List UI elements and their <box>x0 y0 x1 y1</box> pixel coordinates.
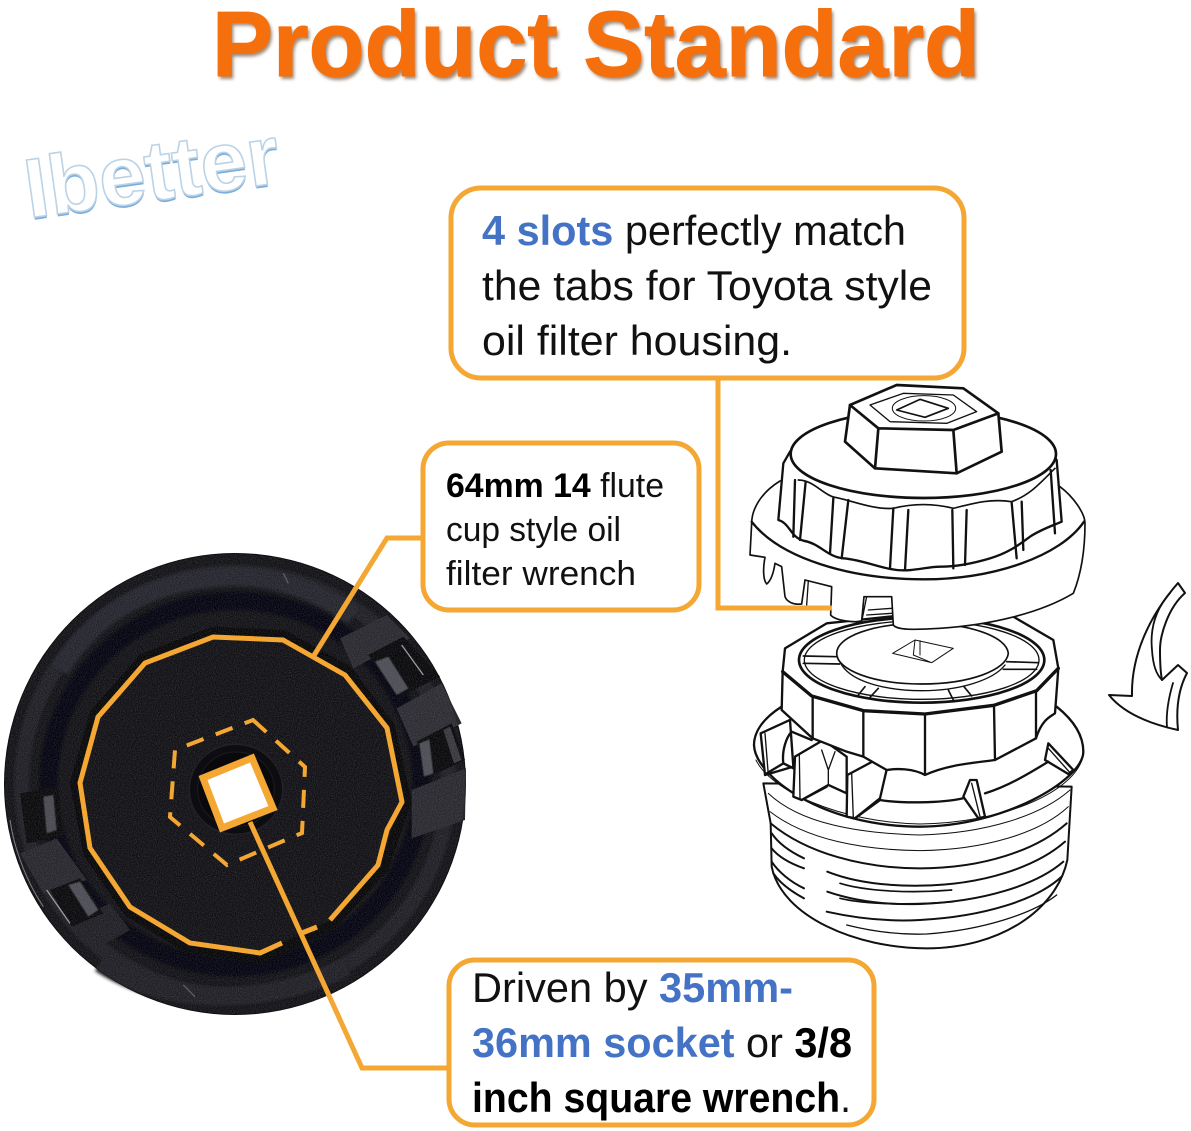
callout: drive size: 36mm socket or 3/8 <box>472 1019 852 1066</box>
callout: 64mm 14 flute <box>423 443 699 610</box>
cup top face <box>791 410 1056 498</box>
hexagon drive head <box>845 385 1002 473</box>
leader: drive callout to square <box>250 822 450 1068</box>
14-flute polygon outline <box>80 637 402 953</box>
outer ring shading <box>10 572 448 997</box>
recessed windows <box>20 637 465 927</box>
centre boss <box>189 744 283 834</box>
oil filter wrench line drawing <box>750 385 1085 629</box>
grip bands <box>20 615 466 947</box>
outer disc <box>4 553 466 1015</box>
dashed hexagon: 36mm socket head <box>170 720 305 865</box>
callout: 64mm 14 flute: 64mm 14 flute <box>446 467 664 505</box>
fluted cup wall <box>778 437 1062 570</box>
housing line drawing <box>754 613 1083 948</box>
callout: drive size: Driven by 35mm- <box>472 964 793 1011</box>
watermark: Ibetter: Ibetter <box>18 107 285 236</box>
callout: 4 slots <box>451 188 964 378</box>
callout: 4 slots: the tabs for Toyota style <box>482 262 932 309</box>
orange outlines on wrench <box>80 637 402 953</box>
octagonal collar <box>782 613 1058 775</box>
disc surface grain <box>5 554 465 1014</box>
callout: 4 slots: 4 slots perfectly match <box>482 207 906 254</box>
flute outline segment <box>302 927 317 933</box>
threaded body <box>763 783 1072 948</box>
callout: 64mm 14 flute: filter wrench <box>446 555 636 593</box>
callout: drive size: inch square wrench. <box>472 1074 851 1121</box>
square drive hole <box>203 758 273 828</box>
callout: 4 slots: oil filter housing. <box>482 317 792 364</box>
leader lines <box>250 378 832 1068</box>
arrow: rotation direction <box>1109 583 1187 730</box>
leader: slots callout to tab <box>718 378 832 608</box>
callout: drive size <box>449 960 874 1125</box>
watermark: Ibetter: Ibetter <box>19 110 285 238</box>
callout: 64mm 14 flute: cup style oil <box>446 511 621 549</box>
flange with 4 slots <box>750 447 1085 629</box>
flange and tabs <box>754 707 1083 827</box>
inner cup floor <box>75 632 407 958</box>
leader: 64mm callout to cup <box>313 538 425 657</box>
wrench photo, underside view <box>4 553 466 1015</box>
